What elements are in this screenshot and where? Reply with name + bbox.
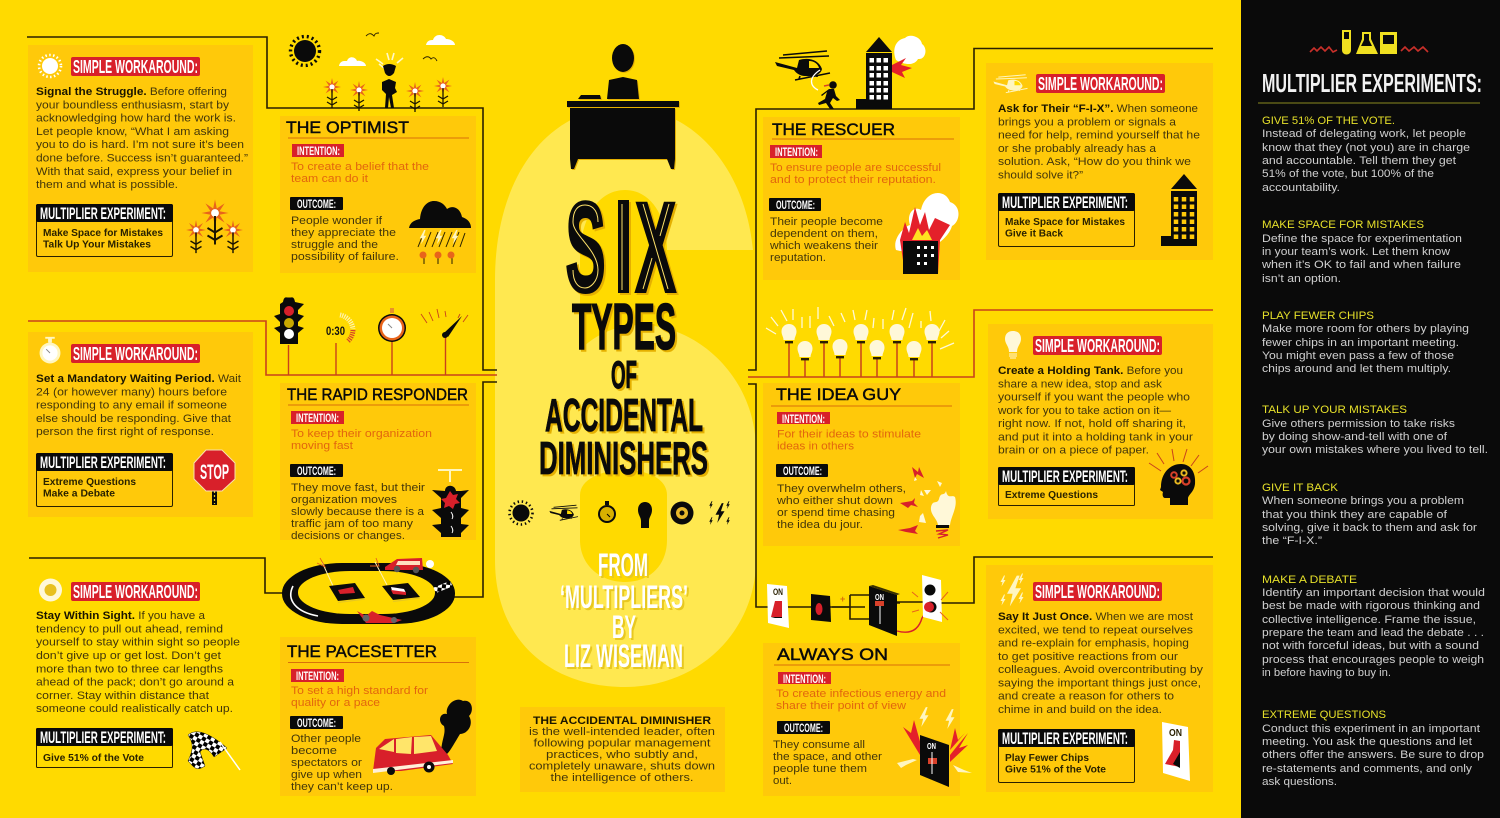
item: give 51%: accountability. bbox=[1262, 182, 1340, 194]
panel: always on: out. bbox=[773, 775, 792, 787]
icon: white stopwatch bbox=[40, 337, 60, 363]
item: give 51%: and accountable. Tell them they get bbox=[1262, 155, 1456, 167]
panel: always on: ALWAYS ON bbox=[777, 645, 888, 664]
item: extreme questions: ask questions. bbox=[1262, 776, 1337, 788]
panel: the optimist: INTENTION: bbox=[297, 144, 340, 158]
icon: on switch bbox=[1162, 722, 1190, 781]
panel: the pacesetter: OUTCOME: bbox=[297, 716, 336, 730]
icon: head with gears bbox=[1149, 449, 1208, 505]
panel: the optimist: they appreciate the bbox=[291, 227, 396, 239]
experiment box bbox=[36, 204, 173, 256]
panel: the rapid responder: They move fast, but their bbox=[291, 482, 425, 494]
experiment box: MULTIPLIER EXPERIMENT: bbox=[1002, 194, 1128, 212]
darker panel backgrounds bbox=[28, 45, 1213, 796]
panel: the optimist: struggle and the bbox=[291, 239, 378, 251]
experiment box bbox=[998, 467, 1135, 506]
experiment box bbox=[36, 728, 173, 768]
workaround text: them and what is possible. bbox=[36, 179, 178, 191]
panel: the rapid responder: OUTCOME: bbox=[297, 464, 336, 478]
rapid responder illustration: 0:30 bbox=[326, 324, 345, 338]
icon: lab glassware bbox=[1310, 30, 1428, 54]
panel: the pacesetter: THE PACESETTER bbox=[287, 642, 437, 661]
panel: the idea guy: INTENTION: bbox=[782, 412, 825, 426]
workaround text: tendency to pull out ahead, remind bbox=[36, 623, 223, 635]
experiment box: Make Space for Mistakes bbox=[1005, 217, 1125, 228]
item: make a debate: Identify an important decision that would bbox=[1262, 587, 1485, 599]
workaround text: done before. Success isn’t guaranteed.” bbox=[36, 152, 248, 164]
panel: always on bbox=[773, 645, 972, 787]
workaround text bbox=[997, 365, 1193, 457]
workaround text: solution. Ask, “How do you think we bbox=[998, 156, 1191, 168]
icon: storm cloud bbox=[409, 201, 471, 264]
background numeral six bbox=[495, 107, 756, 687]
workaround label: SIMPLE WORKAROUND: bbox=[1035, 336, 1160, 356]
icon: exploding bulb bbox=[898, 467, 956, 538]
panel: pacesetter workaround bbox=[36, 578, 240, 770]
item: give it back: solving, give it back to them and ask for bbox=[1262, 522, 1477, 534]
workaround text bbox=[998, 103, 1200, 182]
workaround text: yourself if you want the people who bbox=[998, 392, 1190, 404]
item: make space for mistakes: in your team’s work. Let them know bbox=[1262, 246, 1450, 258]
experiment box: Make Space for Mistakes bbox=[43, 228, 163, 239]
optimist illustration bbox=[290, 33, 455, 112]
workaround text: more than two to three car lengths bbox=[36, 663, 223, 675]
main title bbox=[539, 178, 708, 484]
workaround text: else should be responding. Give that bbox=[36, 413, 232, 425]
panel: the optimist: OUTCOME: bbox=[297, 197, 336, 211]
item: give 51%: know that they (not you) are in charge bbox=[1262, 142, 1470, 154]
definition block: is the well-intended leader, often bbox=[529, 726, 715, 738]
icon: on switch: ON bbox=[1169, 728, 1182, 739]
workaround label bbox=[71, 344, 200, 364]
workaround text: your boundless enthusiasm, start by bbox=[36, 99, 229, 111]
workaround text: person the first right of response. bbox=[36, 426, 214, 438]
panel: always on: the space, and other bbox=[773, 751, 882, 763]
panel: always on: OUTCOME: bbox=[784, 721, 823, 735]
idea guy illustration bbox=[766, 307, 954, 377]
item: give it back: that you think they are capable of bbox=[1262, 509, 1448, 521]
icon: burning building bbox=[895, 193, 958, 274]
workaround text: Create a Holding Tank. Before you bbox=[998, 365, 1183, 377]
workaround text: don’t give up or get lost. Don’t get bbox=[36, 650, 222, 662]
panel: the pacesetter: they can’t keep up. bbox=[291, 781, 393, 793]
item: extreme questions: others offer the answers. Be sure to drop bbox=[1262, 749, 1484, 761]
item: give it back: the “F-I-X.” bbox=[1262, 535, 1322, 547]
item: extreme questions: meeting. You ask the questions and let bbox=[1262, 736, 1472, 748]
workaround text: Set a Mandatory Waiting Period. Wait bbox=[36, 373, 242, 385]
workaround text: you to do is hard. I’m not sure it’s been bbox=[36, 139, 244, 151]
panel: the rapid responder: INTENTION: bbox=[296, 411, 339, 425]
workaround text: chime in and build on the idea. bbox=[998, 704, 1162, 716]
experiment box: Give 51% of the Vote bbox=[1005, 764, 1106, 776]
workaround text: right now. If not, hold off sharing it, bbox=[998, 418, 1186, 430]
workaround text: and put it into a holding tank in your bbox=[998, 432, 1193, 444]
workaround text: acknowledging how hard the work is. bbox=[36, 113, 236, 125]
definition block bbox=[529, 715, 715, 784]
subtitle: ‘MULTIPLIERS’ bbox=[560, 579, 688, 615]
panel: always on workaround bbox=[998, 574, 1203, 782]
workaround text: yourself to stay within sight so people bbox=[36, 637, 240, 649]
item: play fewer chips: chips around and let them multiply. bbox=[1262, 363, 1451, 375]
item: play fewer chips bbox=[1262, 310, 1469, 375]
workaround text: or she probably already has a bbox=[998, 143, 1157, 155]
panel: the rescuer: Their people become bbox=[770, 216, 883, 228]
workaround text: should solve it?” bbox=[998, 170, 1083, 182]
item: make space for mistakes: when it’s OK to fail and when failure bbox=[1261, 259, 1461, 271]
icon: white helicopter bbox=[993, 75, 1028, 93]
workaround text: responding to any email if someone bbox=[36, 400, 227, 412]
workaround label bbox=[71, 582, 200, 602]
panel: the idea guy: For their ideas to stimulate bbox=[777, 428, 921, 440]
panel: multiplier experiments sidebar bbox=[1241, 0, 1500, 818]
rescuer illustration bbox=[775, 36, 925, 109]
panel: the rapid responder: slowly because there is a bbox=[291, 506, 425, 518]
workaround label bbox=[71, 57, 200, 77]
experiment box: Make a Debate bbox=[43, 488, 115, 500]
workaround text bbox=[998, 611, 1203, 716]
icon: broken-down car bbox=[373, 700, 472, 775]
icon: flowers bbox=[186, 200, 243, 253]
experiment box: Extreme Questions bbox=[43, 477, 136, 488]
panel: the pacesetter: become bbox=[291, 745, 337, 757]
item: make a debate: process that encourages people to weigh bbox=[1262, 654, 1484, 666]
panel: the rescuer: dependent on them, bbox=[770, 228, 878, 240]
panel: the optimist: THE OPTIMIST bbox=[286, 118, 409, 137]
workaround text: ahead of the pack; don’t go around a bbox=[36, 677, 235, 689]
item: talk up your mistakes: TALK UP YOUR MISTAKES bbox=[1262, 404, 1407, 416]
rapid responder illustration bbox=[274, 297, 468, 375]
main title: OF bbox=[611, 354, 637, 397]
subtitle bbox=[560, 547, 688, 674]
panel: the pacesetter: give up when bbox=[291, 769, 362, 781]
main title: DIMINISHERS bbox=[539, 432, 708, 484]
item: make a debate: MAKE A DEBATE bbox=[1262, 574, 1357, 586]
panel: the rescuer: INTENTION: bbox=[775, 145, 818, 159]
panel: the optimist bbox=[286, 118, 471, 264]
subtitle: LIZ WISEMAN bbox=[564, 638, 683, 674]
icon: tall building bbox=[1161, 174, 1197, 246]
experiment box bbox=[998, 729, 1135, 782]
panel: rescuer workaround bbox=[993, 74, 1200, 246]
workaround text: and re-explain for emphasis, hoping bbox=[998, 638, 1189, 650]
workaround text bbox=[36, 373, 242, 438]
panel: the pacesetter bbox=[287, 642, 472, 793]
experiment box: Play Fewer Chips bbox=[1005, 753, 1089, 764]
workaround label bbox=[1033, 582, 1162, 602]
panel: the rapid responder bbox=[287, 385, 469, 542]
item: extreme questions bbox=[1262, 709, 1484, 788]
panel: idea guy workaround bbox=[997, 331, 1208, 506]
item: give it back: GIVE IT BACK bbox=[1262, 482, 1339, 494]
item: extreme questions: re-statements and comments, and only bbox=[1262, 763, 1473, 775]
workaround label: SIMPLE WORKAROUND: bbox=[73, 582, 198, 602]
item: talk up your mistakes: Give others permission to take risks bbox=[1262, 418, 1456, 430]
always-on illustration: switches: ON bbox=[773, 587, 783, 597]
icon: white wheel bbox=[39, 578, 62, 602]
panel: the rescuer: which weakens their bbox=[769, 240, 878, 252]
item: extreme questions: EXTREME QUESTIONS bbox=[1262, 709, 1386, 721]
experiment box: Give it Back bbox=[1005, 228, 1063, 240]
panel: the pacesetter: INTENTION: bbox=[296, 669, 339, 683]
workaround text: With that said, express your belief in bbox=[36, 166, 232, 178]
definition block: practices, who subtly and, bbox=[546, 749, 698, 761]
item: play fewer chips: PLAY FEWER CHIPS bbox=[1262, 310, 1374, 322]
experiment box: Give 51% of the Vote bbox=[43, 753, 144, 764]
item: make a debate: collective intelligence. Frame the issue, bbox=[1262, 614, 1476, 626]
workaround text: someone could realistically catch up. bbox=[36, 703, 233, 715]
panel: the rescuer: To ensure people are successful bbox=[770, 162, 941, 174]
item: play fewer chips: fewer chips in an important meeting. bbox=[1262, 337, 1459, 349]
panel: the rapid responder: To keep their organization bbox=[291, 428, 432, 440]
item: make space for mistakes: MAKE SPACE FOR MISTAKES bbox=[1262, 219, 1424, 231]
icon: stop sign bbox=[194, 450, 235, 505]
workaround text: colleagues. Avoid overcontributing by bbox=[998, 664, 1203, 676]
panel: optimist workaround bbox=[36, 55, 248, 256]
panel: the pacesetter: To set a high standard for bbox=[291, 685, 428, 697]
desk illustration bbox=[567, 44, 679, 169]
subtitle: FROM bbox=[598, 547, 648, 583]
definition block: following popular management bbox=[534, 738, 712, 750]
item: give 51%: 51% of the vote, but 100% of the bbox=[1262, 168, 1434, 180]
panel: the idea guy: the idea du jour. bbox=[777, 519, 863, 531]
icon: stop sign: STOP bbox=[200, 461, 229, 484]
item: make a debate bbox=[1262, 574, 1485, 679]
icon: white bulb bbox=[1005, 331, 1021, 358]
panel: the idea guy: They overwhelm others, bbox=[777, 483, 906, 495]
item: give 51%: GIVE 51% OF THE VOTE. bbox=[1262, 115, 1395, 127]
item: make a debate: best be made with rigorous thinking and bbox=[1262, 600, 1480, 612]
item: give it back: When someone brings you a problem bbox=[1262, 495, 1464, 507]
item: extreme questions: Conduct this experiment in an important bbox=[1262, 723, 1480, 735]
panel: the rapid responder: organization moves bbox=[291, 494, 397, 506]
icon: broken traffic light bbox=[432, 470, 469, 537]
workaround text: brain or on a piece of paper. bbox=[998, 445, 1149, 457]
item: make space for mistakes: Define the space for experimentation bbox=[1262, 233, 1462, 245]
panel: rapid responder workaround bbox=[36, 337, 242, 506]
pacesetter illustration: race track bbox=[282, 558, 455, 624]
panel: the idea guy: or spend time chasing bbox=[777, 507, 895, 519]
workaround label: SIMPLE WORKAROUND: bbox=[73, 344, 198, 364]
main title: SIX bbox=[566, 178, 675, 317]
workaround text bbox=[36, 610, 240, 715]
experiment box: Talk Up Your Mistakes bbox=[43, 240, 151, 250]
icon: white lightning bbox=[1000, 574, 1024, 606]
item: play fewer chips: Make more room for others by playing bbox=[1262, 323, 1469, 335]
item: make a debate: prepare the team and lead the debate . . . bbox=[1262, 627, 1484, 639]
definition block: the intelligence of others. bbox=[550, 772, 694, 784]
experiment box: MULTIPLIER EXPERIMENT: bbox=[1002, 730, 1128, 748]
definition block: THE ACCIDENTAL DIMINISHER bbox=[533, 715, 711, 727]
panel: the rescuer: OUTCOME: bbox=[776, 198, 815, 212]
definition block: completely unaware, shuts down bbox=[529, 760, 715, 772]
item: talk up your mistakes: your own mistakes where you lived to tell. bbox=[1262, 444, 1488, 456]
item: give 51%: Instead of delegating work, let people bbox=[1262, 128, 1466, 140]
workaround text: share a new idea, stop and ask bbox=[998, 378, 1162, 390]
panel: the rescuer bbox=[769, 120, 958, 274]
workaround text: corner. Stay within distance that bbox=[36, 690, 210, 702]
item: give 51% bbox=[1262, 115, 1470, 194]
icon: sparking switch bbox=[897, 707, 972, 787]
item: make a debate: in before having to buy in. bbox=[1262, 667, 1391, 679]
workaround text: saying the important things just once, bbox=[998, 678, 1201, 690]
item: make space for mistakes bbox=[1261, 219, 1462, 285]
panel: the rapid responder: decisions or changes. bbox=[291, 530, 405, 542]
workaround text: excited, we tend to repeat ourselves bbox=[998, 624, 1193, 636]
item: talk up your mistakes bbox=[1262, 404, 1488, 456]
item: play fewer chips: You might even pass a few of those bbox=[1262, 350, 1454, 362]
panel: always on: They consume all bbox=[773, 739, 865, 751]
panel: the idea guy bbox=[771, 385, 956, 538]
panel: the rescuer: THE RESCUER bbox=[772, 120, 895, 139]
item: make a debate: not with forceful ideas, but with a sound bbox=[1262, 640, 1479, 652]
panel: the pacesetter: quality or a pace bbox=[291, 697, 380, 709]
panel: the pacesetter: spectators or bbox=[291, 757, 362, 769]
workaround text: Let people know, “What I am asking bbox=[36, 126, 229, 138]
main title: TYPES bbox=[572, 290, 676, 363]
subtitle: BY bbox=[612, 609, 636, 645]
item: talk up your mistakes: by doing show-and-tell with one of bbox=[1262, 431, 1448, 443]
workaround text: need for help, remind yourself that he bbox=[998, 130, 1200, 142]
workaround text: work for you to take action on it— bbox=[997, 405, 1172, 417]
experiment box: MULTIPLIER EXPERIMENT: bbox=[40, 205, 166, 223]
panel: the rapid responder: moving fast bbox=[291, 440, 354, 452]
workaround text: brings you a problem or signals a bbox=[998, 116, 1177, 128]
panel: always on: INTENTION: bbox=[783, 672, 826, 686]
experiment box: MULTIPLIER EXPERIMENT: bbox=[40, 454, 166, 472]
panel: the optimist: team can do it bbox=[291, 173, 369, 185]
workaround text: Signal the Struggle. Before offering bbox=[36, 86, 227, 98]
always-on illustration: switches: + bbox=[840, 594, 845, 604]
panel: the rapid responder: THE RAPID RESPONDER bbox=[287, 385, 468, 404]
panel: the rescuer: reputation. bbox=[770, 252, 826, 264]
workaround text: Stay Within Sight. If you have a bbox=[36, 610, 206, 622]
workaround label bbox=[1033, 336, 1162, 356]
workaround text bbox=[36, 86, 248, 191]
always-on illustration: switches: ON bbox=[875, 593, 884, 602]
icon: white sun bbox=[39, 55, 61, 77]
workaround text: Say It Just Once. When we are most bbox=[998, 611, 1194, 623]
workaround text: 24 (or however many) hours before bbox=[36, 386, 227, 398]
main title: ACCIDENTAL bbox=[545, 389, 703, 441]
panel: the rescuer: and to protect their reputation. bbox=[770, 174, 936, 186]
workaround text: Ask for Their “F-I-X”. When someone bbox=[998, 103, 1198, 115]
workaround label bbox=[1036, 74, 1165, 94]
panel: the pacesetter: Other people bbox=[291, 733, 361, 745]
workaround label: SIMPLE WORKAROUND: bbox=[1038, 74, 1163, 94]
icon: checkered flag bbox=[188, 732, 240, 770]
panel: the optimist: To create a belief that the bbox=[291, 161, 429, 173]
experiment box: MULTIPLIER EXPERIMENT: bbox=[1002, 468, 1128, 486]
panel: the rapid responder: traffic jam of too many bbox=[291, 518, 413, 530]
experiment box: MULTIPLIER EXPERIMENT: bbox=[40, 729, 166, 747]
panel: the optimist: possibility of failure. bbox=[291, 251, 399, 263]
experiment box: Extreme Questions bbox=[1005, 490, 1098, 501]
panel: always on: people tune them bbox=[773, 763, 867, 775]
panel: the optimist: People wonder if bbox=[291, 215, 383, 227]
panel: always on: To create infectious energy and bbox=[776, 688, 946, 700]
experiment box bbox=[998, 193, 1135, 246]
panel: always on: share their point of view bbox=[776, 700, 907, 712]
panel: the idea guy: who either shut down bbox=[776, 495, 893, 507]
workaround text: and create a reason for others to bbox=[998, 691, 1174, 703]
panel: the idea guy: THE IDEA GUY bbox=[776, 385, 901, 404]
connector lines bbox=[27, 37, 1213, 607]
workaround text: to get positive reactions from our bbox=[998, 651, 1178, 663]
icon: sparking switch: ON bbox=[927, 742, 936, 751]
item: give it back bbox=[1262, 482, 1477, 547]
workaround label: SIMPLE WORKAROUND: bbox=[73, 57, 198, 77]
workaround label: SIMPLE WORKAROUND: bbox=[1035, 582, 1160, 602]
experiment box bbox=[36, 453, 173, 506]
always-on illustration: switches bbox=[767, 575, 948, 636]
panel: the idea guy: OUTCOME: bbox=[783, 464, 822, 478]
six type icons row bbox=[510, 501, 730, 528]
panel: the idea guy: ideas in others bbox=[777, 440, 854, 452]
item: make space for mistakes: isn’t an option. bbox=[1262, 273, 1341, 285]
